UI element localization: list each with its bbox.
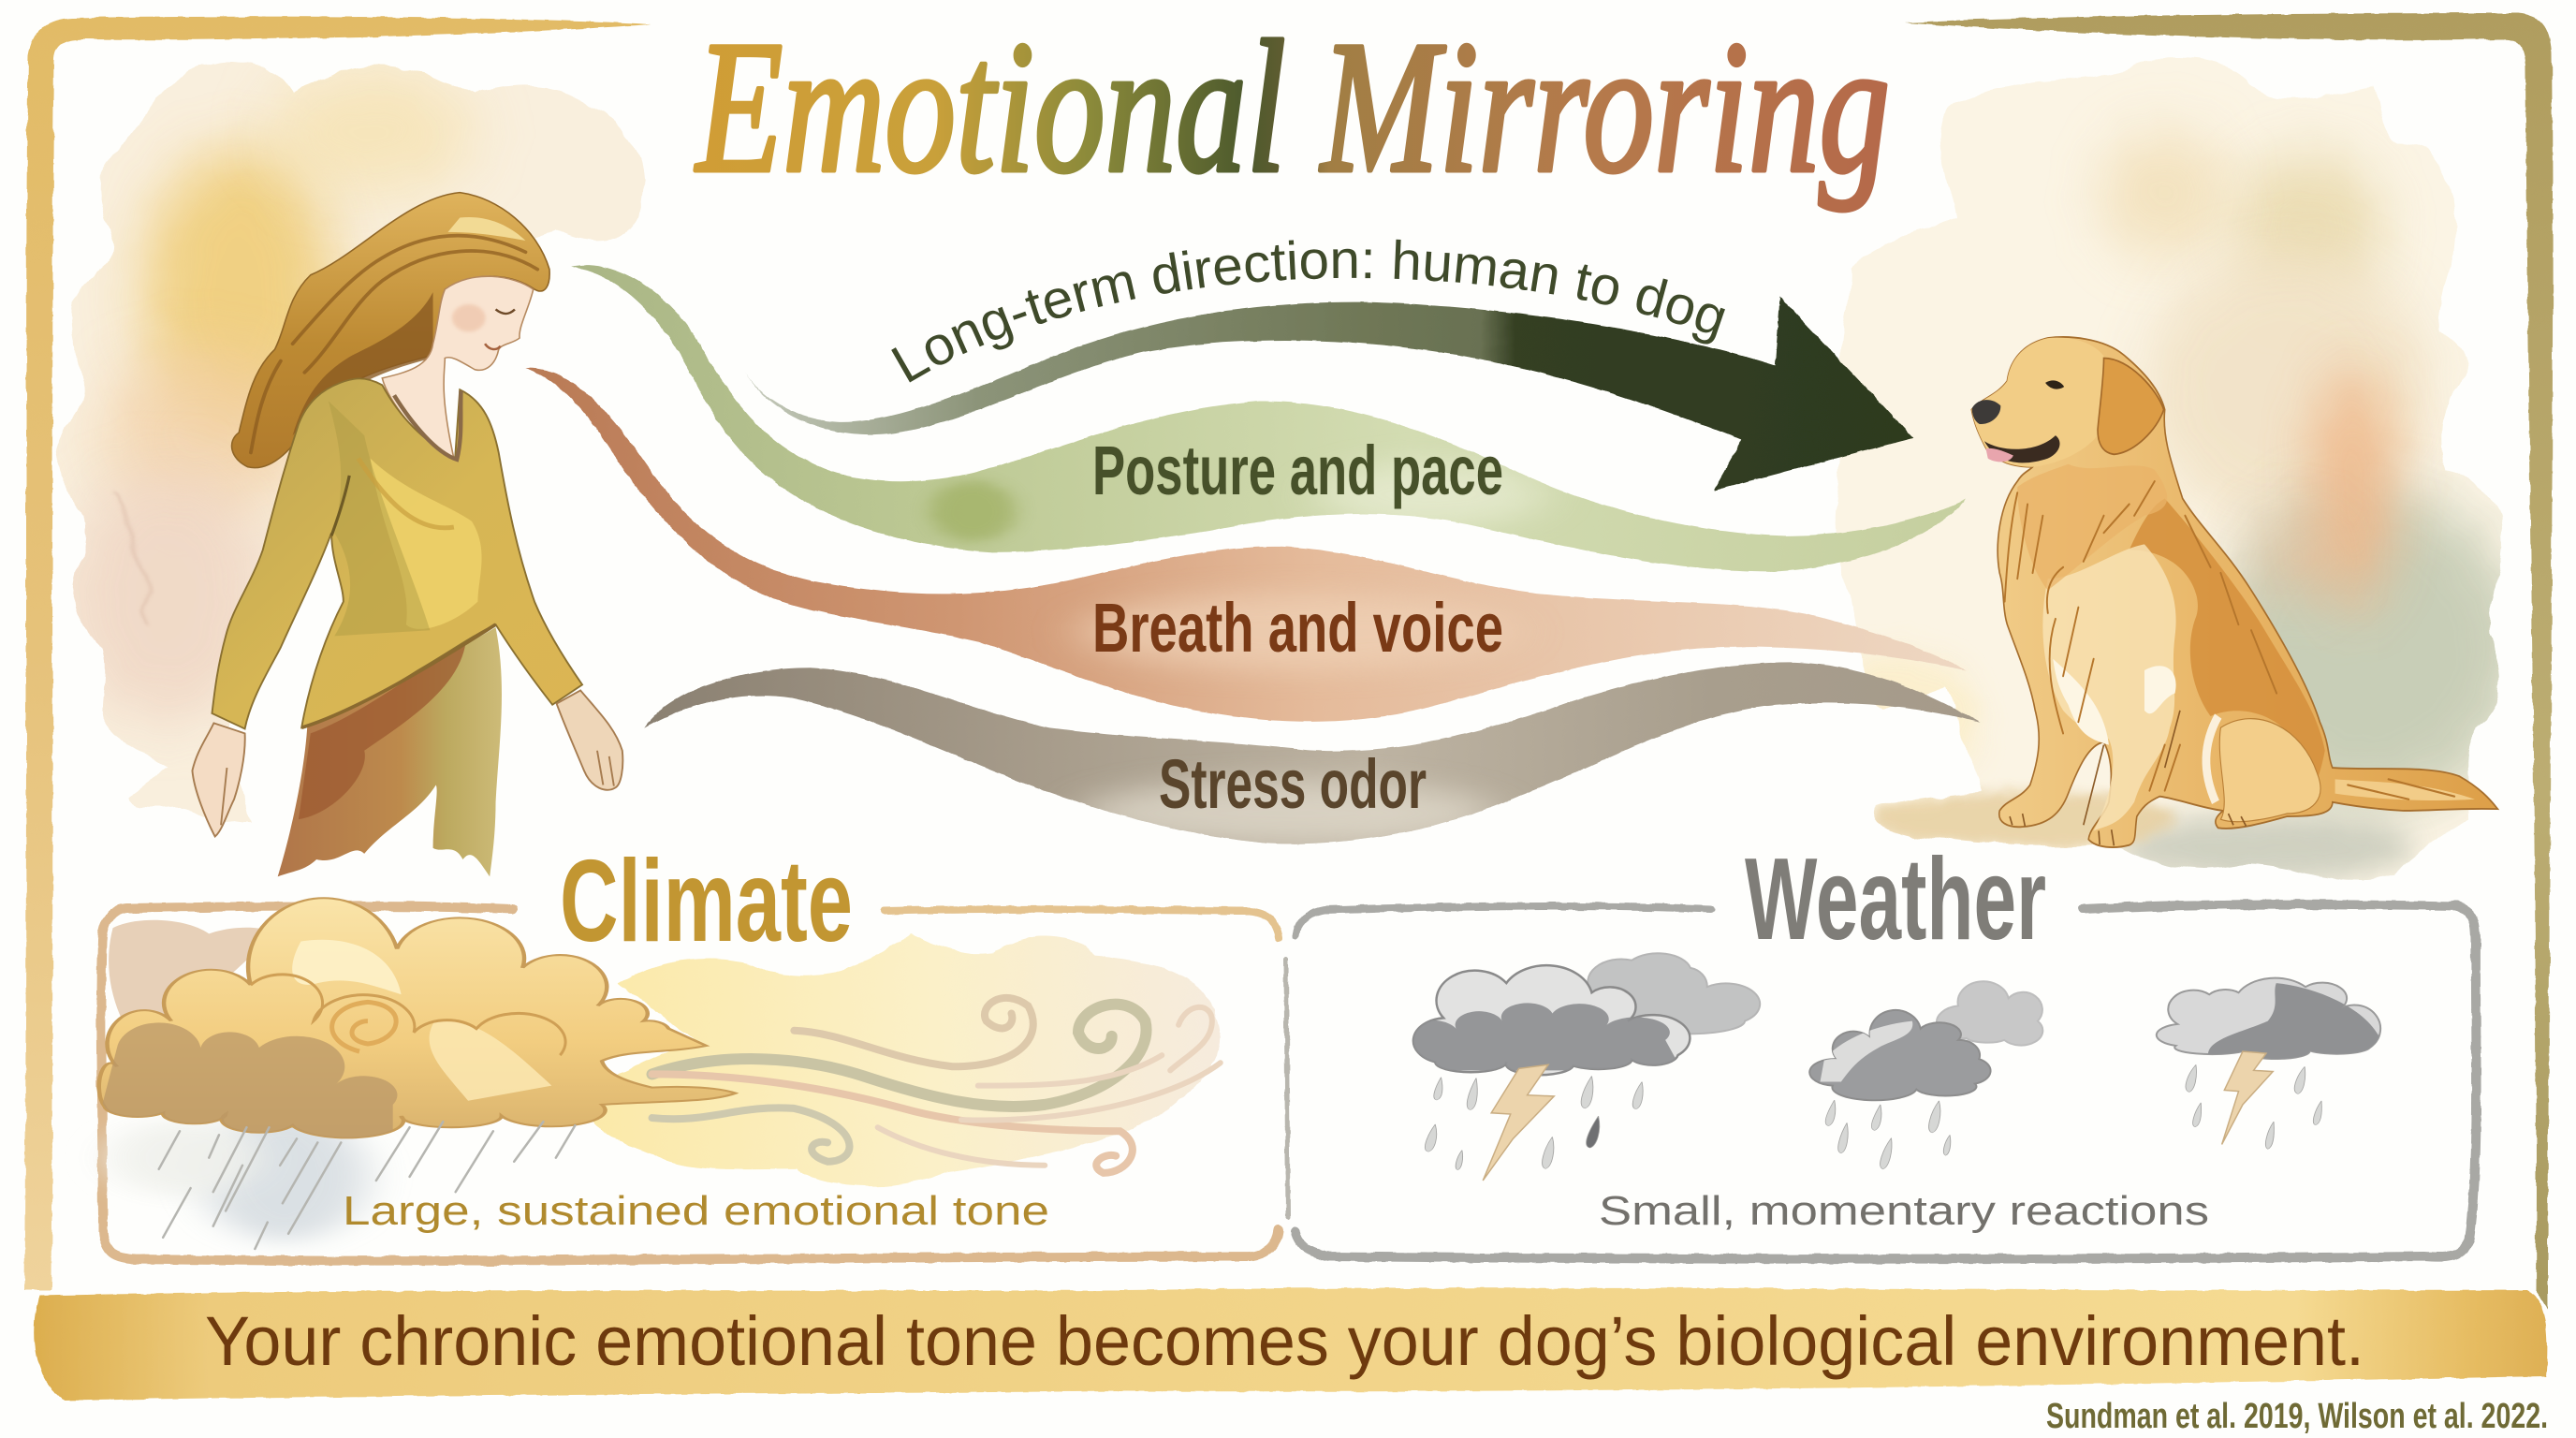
weather caption: Small, momentary reactions [1599,1188,2209,1234]
woman: hair back [232,193,549,468]
banner strip [34,1288,2547,1401]
cloud spiral [332,1002,396,1051]
weather panel border [1286,904,2477,1259]
wind swirl: upper [794,998,1033,1066]
banner message: Your chronic emotional tone becomes your dog’s biological environment. [205,1302,2364,1380]
storm cloud small [2157,978,2385,1144]
stream: breath and voice [524,368,1966,722]
dog: nose and mouth [1972,400,2000,424]
cloud shading [100,940,565,1138]
main golden cloud [99,898,736,1137]
label text on curve: long-term direction: Long-term direction: human to dog [891,240,1725,382]
dog: chest highlight [2042,544,2176,830]
climate panel border [101,906,1279,1261]
woman: neck and face [382,276,534,459]
woman: hair dark underlayer [293,292,433,435]
wind swirl: lower [652,1108,850,1162]
label: breath and voice: Breath and voice [1092,589,1503,667]
label: posture and pace: Posture and pace [1092,432,1503,509]
flow arrows [524,265,1981,846]
dog: ear [2098,358,2164,454]
climate heading: Climate [560,837,853,966]
dog: paw lines [2010,711,2247,845]
panel: climate [99,898,1279,1261]
dog: fur strokes [2005,481,2454,800]
woman: skirt [278,627,502,876]
storm cloud large [1403,953,1760,1181]
weather heading: Weather [1745,835,2046,964]
rain streaks [159,1122,575,1249]
label: stress odor: Stress odor [1159,745,1427,823]
panel: weather [1286,904,2477,1259]
rain wash [200,1112,368,1241]
woman figure [192,193,622,876]
wind swirl: main grey [652,1005,1147,1107]
dog: body silhouette [1971,337,2497,847]
woman: sweater [212,378,582,728]
dog: head [1971,338,2109,467]
frame: left and top-left stroke [24,17,651,1290]
title: Emotional Mirroring [695,2,1890,212]
frame: right and top-right stroke [1906,13,2553,1310]
raindrops [1425,1064,2321,1170]
dog figure [1971,337,2497,847]
dog: tail highlight [2335,779,2475,800]
stream: stress odor [644,662,1981,846]
climate illustration [99,898,1221,1249]
back cloud [109,920,276,1027]
wind streaks [878,1007,1221,1166]
weather clouds [1403,953,2385,1181]
dog: haunch [2219,719,2320,822]
climate caption: Large, sustained emotional tone [343,1188,1049,1234]
wash behind woman [56,62,646,822]
woman: hair strands [251,236,537,452]
dog: darker back patch [2130,498,2325,802]
wind swirl: tan [652,1074,1133,1173]
woman: left hand [192,723,245,837]
yellow wash [583,933,1220,1186]
arrow: long-term direction [744,297,1913,491]
woman: right hand [557,690,622,790]
wash behind dog [1835,56,2503,880]
storm cloud medium [1809,981,2042,1100]
stream: posture and pace [572,265,1966,571]
